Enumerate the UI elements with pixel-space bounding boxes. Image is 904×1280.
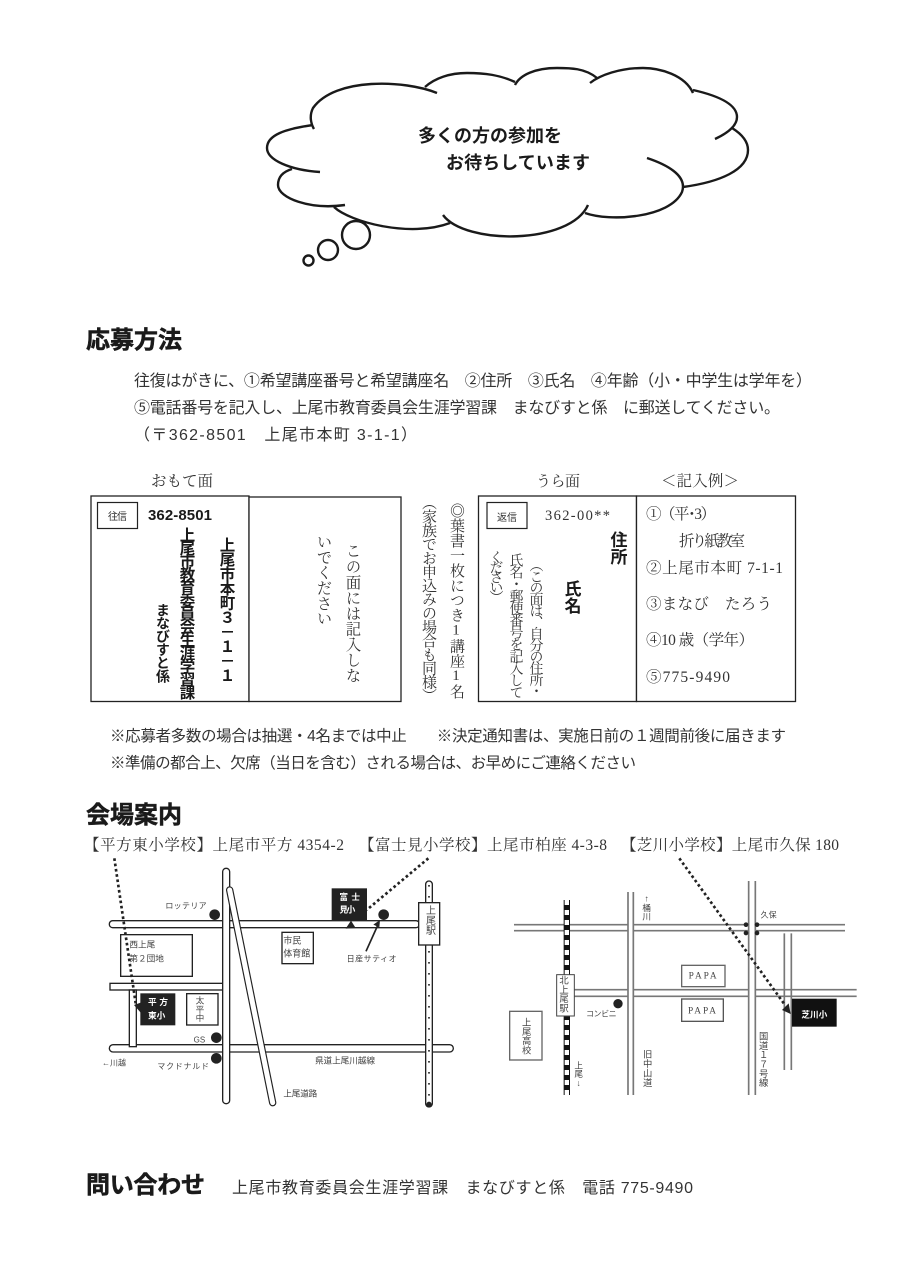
stamp box: outgoing: 往信 [108,510,127,523]
instructions: （この面は、自分の住所・ [528,558,544,698]
postal code: 362-8501 [148,507,212,524]
note: do not write: この面には記入しな [344,543,361,683]
instructions: ください） [488,550,504,604]
map labels: 日産サティオ [347,954,397,964]
venue addresses: 【芝川小学校】上尾市久保 180 [621,836,839,854]
label: front side: おもて面 [151,472,213,490]
panel: entry example: ②上尾市本町 7-1-1 [646,559,783,577]
building: PAPA north [682,965,725,987]
venue addresses [84,836,839,854]
panel: entry example: ⑤775-9490 [646,668,730,686]
panel: entry example: ①（平･3） [646,505,716,523]
building: junior high: 太平中 [195,995,205,1023]
stamp box: reply: 返信 [497,511,517,524]
application instructions: 往復はがきに、①希望講座番号と希望講座名 ②住所 ③氏名 ④年齢（小・中学生は学年を） [134,372,812,390]
panel: entry example: ③まなび たろう [646,595,772,613]
stamp box: reply [487,502,527,528]
building: PAPA south: PAPA [688,1006,716,1016]
school: Fujimi: 富士 [339,891,360,902]
note: do not write: いでください [314,534,332,626]
inquiry contact: 上尾市教育委員会生涯学習課 まなびすと係 電話 775-9490 [232,1179,693,1197]
note: one course per card: ◎葉書一枚につき1講座1名 [448,503,464,699]
dotted leader: Shibakawa [679,858,791,1014]
notes: ※応募者多数の場合は抽選・4名までは中止 ※決定通知書は、実施日前の１週間前後に届きます [110,727,786,745]
building: housing estate [121,935,192,976]
map labels: ←川越 [102,1057,126,1067]
sender postal code: 362-00** [545,508,610,524]
name field: 氏名 [562,580,581,614]
station: 上尾駅 [423,905,435,936]
contact column: まなびすと係 [155,603,171,684]
map labels: 国道１７号線 [758,1031,768,1088]
building: housing estate: 西上尾 [129,939,156,949]
building: junior high [187,994,218,1025]
school: Hirakata East [140,993,175,1025]
arrow: Saitio [366,920,380,951]
map labels: ↑桶川 [642,893,652,921]
thought bubble: small [304,256,314,266]
stamp box: outgoing [98,502,138,528]
map: west [102,858,453,1107]
map labels: マクドナルド [157,1062,209,1071]
map labels [574,893,777,1088]
thought bubble: large [342,221,370,249]
organisation column: 上尾市教育委員会生涯学習課 [178,527,195,700]
thought bubble: medium [318,240,338,260]
map labels: GS [194,1035,205,1044]
note: one course per card [420,495,464,703]
note: do not write [314,534,361,683]
school: Shibakawa: 芝川小 [801,1008,828,1019]
dotted leader: Hirakata East [114,858,141,1013]
cloud message: お待ちしています [446,153,590,173]
school: Hirakata East: 東小 [148,1009,166,1020]
map labels: ロッテリア [165,902,207,911]
building: gym: 市民 [283,934,301,945]
heading: venues: 会場案内 [86,802,182,829]
note: one course per card: （家族でお申込みの場合も同様） [420,495,436,703]
school: Hirakata East: 平方 [148,996,168,1007]
panel: entry example: ④10 歳（学年） [646,630,754,649]
application instructions [134,372,812,444]
instructions: 氏名・郵便番号を記入して [508,553,524,699]
building: housing estate: 第２団地 [129,952,164,963]
station [419,903,440,945]
cloud message [418,125,590,173]
dotted leader: Fujimi [346,858,428,929]
landmark dots [613,922,759,1008]
label: entry example: ＜記入例＞ [661,472,739,490]
station [557,975,574,1016]
building: gym: 体育館 [283,948,310,959]
school: Fujimi: 見小 [339,904,356,915]
instructions [488,550,544,699]
building: high school [510,1011,542,1060]
application instructions: （〒362-8501 上尾市本町 3-1-1） [134,426,417,444]
school: Shibakawa [792,999,837,1027]
map labels: コンビニ [586,1010,617,1019]
railway [564,900,570,1095]
building: high school: 上尾高校 [521,1017,531,1056]
address column: 上尾市本町３－１－１ [218,537,235,683]
application instructions: ⑤電話番号を記入し、上尾市教育委員会生涯学習課 まなびすと係 に郵送してください。 [134,399,780,417]
school: Fujimi [332,888,367,921]
panel: postcard front [91,496,401,702]
map labels: 県道上尾川越線 [315,1055,375,1066]
map labels: 上尾道路 [283,1088,318,1099]
heading: application method: 応募方法 [86,327,182,354]
map labels: 旧中山道 [642,1049,652,1088]
building: PAPA south [682,999,723,1021]
panel: entry example: 折り紙教室 [679,532,745,550]
heading: inquiries: 問い合わせ [86,1172,205,1199]
panel: postcard back [478,496,636,702]
cloud message: 多くの方の参加を [418,125,562,146]
address field: 住所 [608,531,627,565]
map labels: 上尾↓ [574,1060,584,1088]
venue addresses: 【平方東小学校】上尾市平方 4354-2 [84,836,344,854]
map labels: 久保 [761,909,777,919]
venue addresses: 【富士見小学校】上尾市柏座 4-3-8 [359,836,607,854]
landmark dots [209,909,389,1064]
panel: entry example [636,496,796,702]
label: back side: うら面 [536,473,580,490]
thought cloud [267,68,748,266]
notes [110,727,786,772]
building: gym [282,932,313,964]
notes: ※準備の都合上、欠席（当日を含む）される場合は、お早めにご連絡ください [110,754,636,772]
map: east [510,858,857,1095]
map labels [102,902,397,1099]
building: PAPA north: PAPA [689,972,717,982]
station: 北上尾駅 [558,975,569,1014]
